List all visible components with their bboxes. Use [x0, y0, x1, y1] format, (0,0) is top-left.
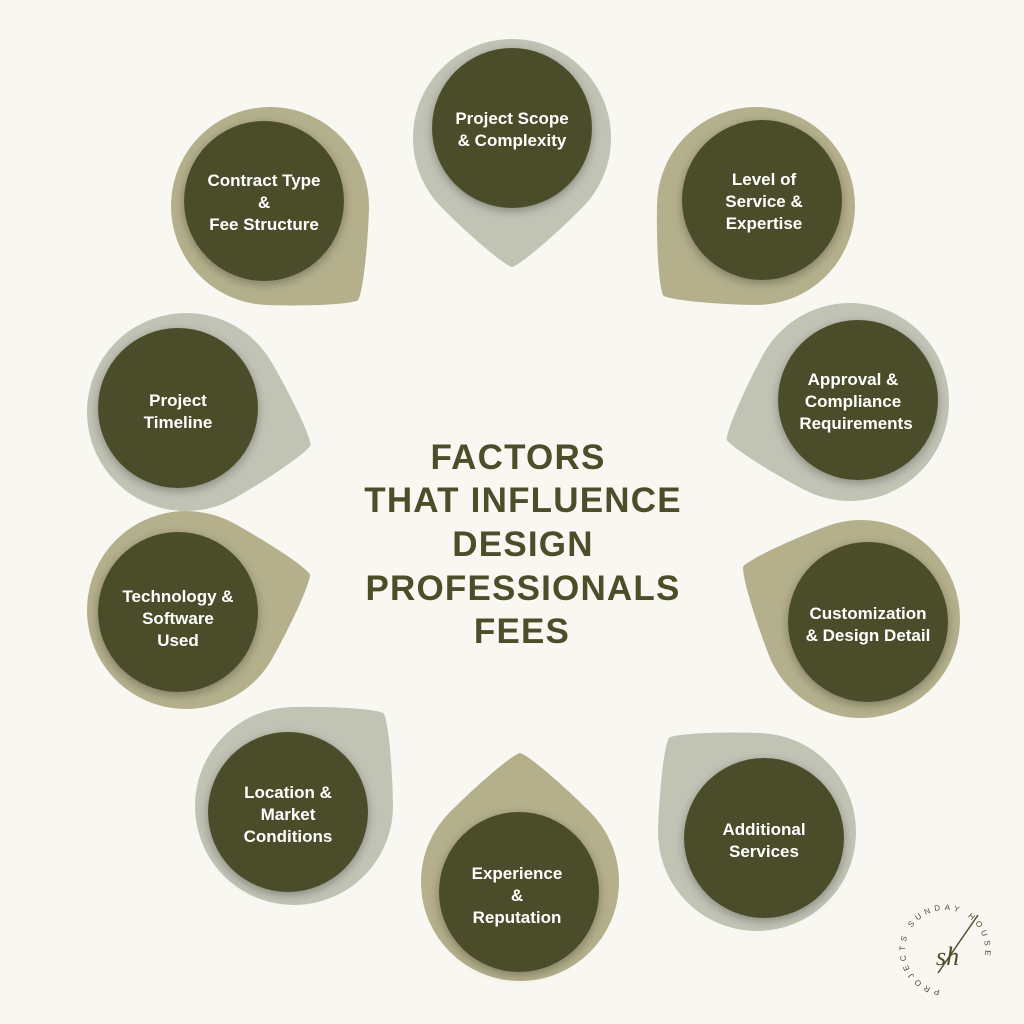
factor: Additional Services: [658, 733, 856, 931]
factor: Experience & Reputation: [384, 746, 656, 1018]
factor: Approval & Compliance Requirements: [720, 272, 980, 532]
factor: Project Timeline: [55, 281, 317, 543]
factor: Experience & Reputation: Experience: [472, 864, 562, 883]
logo: Sunday House Projects: sh: [936, 942, 959, 971]
factor: Contract Type & Fee Structure: Fee Structure: [209, 215, 319, 234]
factor: Approval & Compliance Requirements: Requirements: [799, 414, 913, 433]
factor: Additional Services: Services: [729, 842, 799, 861]
factor: Contract Type & Fee Structure: Contract Type: [207, 171, 321, 190]
title: DESIGN: [452, 525, 594, 564]
factor: Project Timeline: Project: [149, 391, 207, 410]
factor: Level of Service & Expertise: Expertise: [726, 214, 802, 233]
factor: Location & Market Conditions: Market: [261, 805, 316, 824]
factor: Location & Market Conditions: [196, 708, 392, 904]
factor: Contract Type & Fee Structure: &: [258, 193, 270, 212]
factor: Level of Service & Expertise: [658, 108, 854, 304]
factor: Customization & Design Detail: & Design Detail: [806, 626, 930, 645]
factor: Project Scope & Complexity: & Complexity: [458, 131, 567, 150]
title: FACTORS: [430, 438, 606, 477]
title: [364, 438, 682, 651]
factor: Technology & Software Used: [55, 479, 317, 741]
factor: Experience & Reputation: Reputation: [473, 908, 561, 927]
factor: Location & Market Conditions: Conditions: [244, 827, 332, 846]
title: THAT INFLUENCE: [364, 481, 682, 520]
factor: Customization & Design Detail: [737, 495, 985, 743]
factor: Location & Market Conditions: Location &: [244, 783, 332, 802]
logo: Sunday House Projects: PROJECTS SUNDAY HOUSE: [899, 904, 991, 996]
factor: Approval & Compliance Requirements: Approval &: [808, 370, 898, 389]
factor: Level of Service & Expertise: Level of: [732, 170, 796, 189]
factor: Technology & Software Used: Technology &: [122, 587, 234, 606]
factor: Project Scope & Complexity: [376, 2, 648, 274]
factor: Project Timeline: Timeline: [144, 413, 212, 432]
factor: Level of Service & Expertise: Service &: [725, 192, 803, 211]
factor: Additional Services: Additional: [722, 820, 806, 839]
factor: Contract Type & Fee Structure: [171, 107, 369, 305]
factor: Technology & Software Used: Used: [157, 631, 199, 650]
factor: Customization & Design Detail: Customization: [809, 604, 927, 623]
factor: Technology & Software Used: Software: [142, 609, 214, 628]
factor: Experience & Reputation: &: [511, 886, 523, 905]
title: PROFESSIONALS: [365, 569, 681, 608]
factor: Project Scope & Complexity: Project Scope: [455, 109, 569, 128]
factor: Approval & Compliance Requirements: Compliance: [805, 392, 901, 411]
title: FEES: [474, 612, 570, 651]
